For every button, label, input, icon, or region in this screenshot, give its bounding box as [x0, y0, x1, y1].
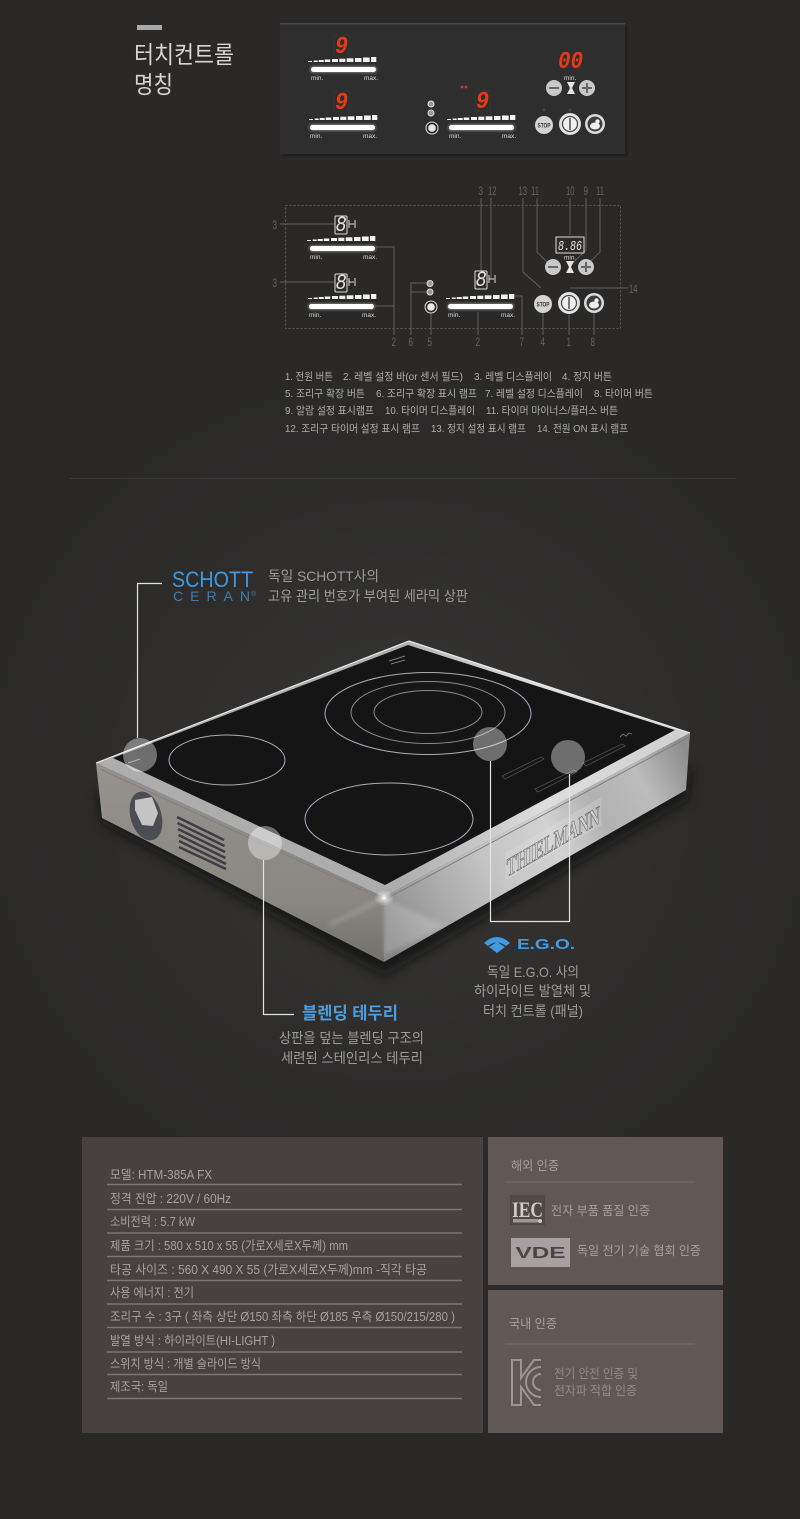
- vent slits: [177, 817, 226, 869]
- level group 2: [308, 271, 376, 319]
- level group 3: [446, 268, 515, 319]
- legend text: 4. 정지 버튼: [562, 371, 612, 383]
- level group 1: 8: [336, 213, 346, 238]
- logo: schott ceran: CERAN: [173, 588, 250, 604]
- timer display: 00: [558, 49, 583, 76]
- icon: vde: VDE: [516, 1245, 566, 1262]
- callout: blending edge: 블렌딩 테두리: [302, 1004, 398, 1023]
- legend text: [285, 371, 653, 435]
- panel: domestic certification: 국내 인증: [509, 1317, 557, 1331]
- reference numbers: 7: [520, 335, 524, 349]
- timer buttons: [546, 80, 595, 96]
- panel: touch control photo: [280, 23, 627, 156]
- callout: blending edge: 상판을 덮는 블렌딩 구조의: [279, 1030, 424, 1046]
- level group 3: 8: [476, 268, 486, 293]
- spec rows: 제품 크기 : 580 x 510 x 55 (가로X세로X두께) mm: [110, 1239, 348, 1253]
- schott description: 고유 관리 번호가 부여된 세라믹 상판: [268, 588, 468, 604]
- legend text: 3. 레벨 디스플레이: [474, 371, 552, 383]
- callout: blending edge: [248, 826, 424, 1066]
- legend text: 8. 타이머 버튼: [594, 388, 653, 400]
- callout: ego: 터치 컨트롤 (패널): [483, 1003, 583, 1019]
- left side: [96, 763, 384, 962]
- reference numbers: 4: [540, 335, 545, 349]
- callout: ego: 하이라이트 발열체 및: [474, 983, 591, 999]
- logo: schott ceran: [172, 567, 257, 604]
- logo: schott ceran: SCHOTT: [172, 567, 253, 592]
- title: touch control names: 터치컨트롤: [134, 42, 234, 69]
- reference numbers: 8: [590, 335, 595, 349]
- legend text: 9. 알람 설정 표시램프: [285, 404, 374, 417]
- panel: overseas certification: 독일 전기 기술 협회 인증: [577, 1244, 701, 1258]
- reference numbers: 9: [584, 184, 588, 198]
- level control 1: min.: [311, 75, 323, 82]
- reference numbers: 1: [566, 335, 571, 349]
- spec rows: 스위치 방식 : 개별 슬라이드 방식: [110, 1357, 261, 1371]
- legend text: 5. 조리구 확장 버튼: [285, 387, 365, 400]
- right side: [384, 733, 690, 962]
- title: touch control names: 명칭: [134, 72, 173, 99]
- reference numbers: 3: [272, 276, 277, 290]
- callout: blending edge: 세련된 스테인리스 테두리: [281, 1050, 423, 1066]
- panel: overseas certification: 해외 인증: [511, 1159, 559, 1173]
- reference numbers: 6: [408, 335, 413, 349]
- level group 1: max.: [363, 254, 377, 261]
- legend text: 10. 타이머 디스플레이: [385, 405, 475, 417]
- burners: [169, 672, 531, 855]
- legend text: 14. 전원 ON 표시 램프: [537, 423, 628, 435]
- spec rows: 조리구 수 : 3구 ( 좌측 상단 Ø150 좌측 하단 Ø185 우측 Ø150/215/280 ): [110, 1310, 455, 1324]
- panel: domestic certification: 전기 안전 인증 및: [554, 1367, 638, 1381]
- diagram: numbered control layout: [272, 184, 638, 349]
- reference numbers: [272, 184, 638, 349]
- function buttons: STOP: [538, 122, 551, 130]
- level display 1: 9: [335, 34, 348, 61]
- reference numbers: 12: [488, 184, 497, 198]
- legend text: 1. 전원 버튼: [285, 371, 333, 383]
- level group 3: max.: [501, 312, 515, 319]
- reference numbers: 2: [476, 335, 480, 349]
- corner sparkle: [374, 890, 394, 906]
- timer display: min.: [564, 254, 576, 262]
- schott description: [268, 568, 468, 604]
- logo: schott ceran: ®: [251, 590, 257, 598]
- level group 3: min.: [448, 312, 460, 319]
- timer display: [556, 237, 584, 262]
- function buttons: [534, 292, 604, 314]
- icon: iec: IEC: [512, 1197, 543, 1222]
- level control 3: [447, 115, 516, 140]
- spec rows: 모델: HTM-385A FX: [110, 1168, 213, 1182]
- reference numbers: 11: [531, 184, 539, 198]
- level control 2: max.: [363, 133, 377, 140]
- panel: overseas certification: [488, 1137, 723, 1285]
- shadow: [98, 765, 692, 976]
- callout: schott ceran: [123, 567, 468, 772]
- function buttons: [535, 108, 605, 135]
- level control 1: max.: [364, 75, 378, 82]
- brand plate: THIELMANN: [507, 800, 600, 883]
- callout: ego: 독일 E.G.O. 사의: [487, 964, 579, 980]
- level control 1: [308, 57, 378, 82]
- brushed highlights: [330, 898, 445, 955]
- title: touch control names: [134, 25, 234, 99]
- logo: ego: [484, 936, 575, 953]
- spec rows: 소비전력 : 5.7 kW: [110, 1215, 195, 1229]
- reference numbers: 3: [478, 184, 483, 198]
- reference numbers: 10: [566, 184, 575, 198]
- level display 3: 9: [476, 89, 489, 116]
- reference numbers: 2: [392, 335, 396, 349]
- row lines: [107, 1184, 462, 1398]
- reference numbers: 3: [272, 218, 277, 232]
- touch sliders on glass: [128, 656, 632, 792]
- level group 1: [307, 213, 377, 261]
- reference numbers: 11: [596, 184, 604, 198]
- spec rows: [110, 1168, 455, 1394]
- expansion lamps and button: [426, 101, 438, 134]
- spec rows: 제조국: 독일: [110, 1380, 168, 1394]
- timer buttons: [545, 259, 594, 275]
- spec rows: 사용 에너지 : 전기: [110, 1286, 194, 1300]
- legend text: 7. 레벨 설정 디스플레이: [485, 388, 583, 400]
- rim: [96, 641, 690, 897]
- level group 1: min.: [310, 254, 322, 261]
- timer display: min.: [564, 75, 576, 82]
- brand plate: [505, 797, 601, 884]
- spec rows: 타공 사이즈 : 560 X 490 X 55 (가로X세로X두께)mm -직각 타공: [110, 1263, 427, 1277]
- legend text: 6. 조리구 확장 표시 램프: [376, 387, 477, 400]
- level group 2: 8: [336, 271, 346, 296]
- callout: ego: [473, 727, 591, 1019]
- product: ceramic cooktop: [96, 641, 692, 976]
- level control 3: max.: [502, 133, 516, 140]
- level control 2: [309, 115, 377, 140]
- panel: domestic certification: 전자파 적합 인증: [554, 1384, 637, 1398]
- icon: iec: [510, 1195, 545, 1225]
- timer display: 8.86: [558, 239, 582, 255]
- level group 2: max.: [362, 312, 376, 319]
- legend text: 13. 정지 설정 표시 램프: [431, 423, 526, 435]
- legend text: 12. 조리구 타이머 설정 표시 램프: [285, 423, 420, 435]
- reference numbers: 13: [518, 184, 527, 198]
- icon: kc: [512, 1360, 541, 1405]
- level control 3: min.: [449, 133, 461, 140]
- level control 2: min.: [310, 133, 322, 140]
- spec rows: 발열 방식 : 하이라이트(HI-LIGHT ): [110, 1334, 275, 1348]
- legend text: 2. 레벨 설정 바(or 센서 필드): [343, 371, 463, 383]
- legend text: 11. 타이머 마이너스/플러스 버튼: [486, 405, 618, 417]
- panel: specifications: [82, 1137, 483, 1433]
- logo: ego: E.G.O.: [517, 936, 575, 953]
- level group 2: min.: [309, 312, 321, 319]
- level display 3: [461, 86, 490, 116]
- panel: overseas certification: 전자 부품 품질 인증: [551, 1204, 650, 1218]
- schott description: 독일 SCHOTT사의: [268, 568, 379, 584]
- level display 2: 9: [335, 90, 348, 117]
- reference numbers: 14: [629, 282, 638, 296]
- leader lines: [280, 198, 628, 335]
- function buttons: STOP: [536, 302, 550, 308]
- panel: domestic certification: [488, 1290, 723, 1433]
- expansion lamps and button: [425, 280, 437, 313]
- glass top: [113, 645, 675, 885]
- icon: vde: [511, 1238, 570, 1267]
- spec rows: 정격 전압 : 220V / 60Hz: [110, 1192, 231, 1206]
- knob hole: [124, 788, 168, 844]
- reference numbers: 5: [428, 335, 432, 349]
